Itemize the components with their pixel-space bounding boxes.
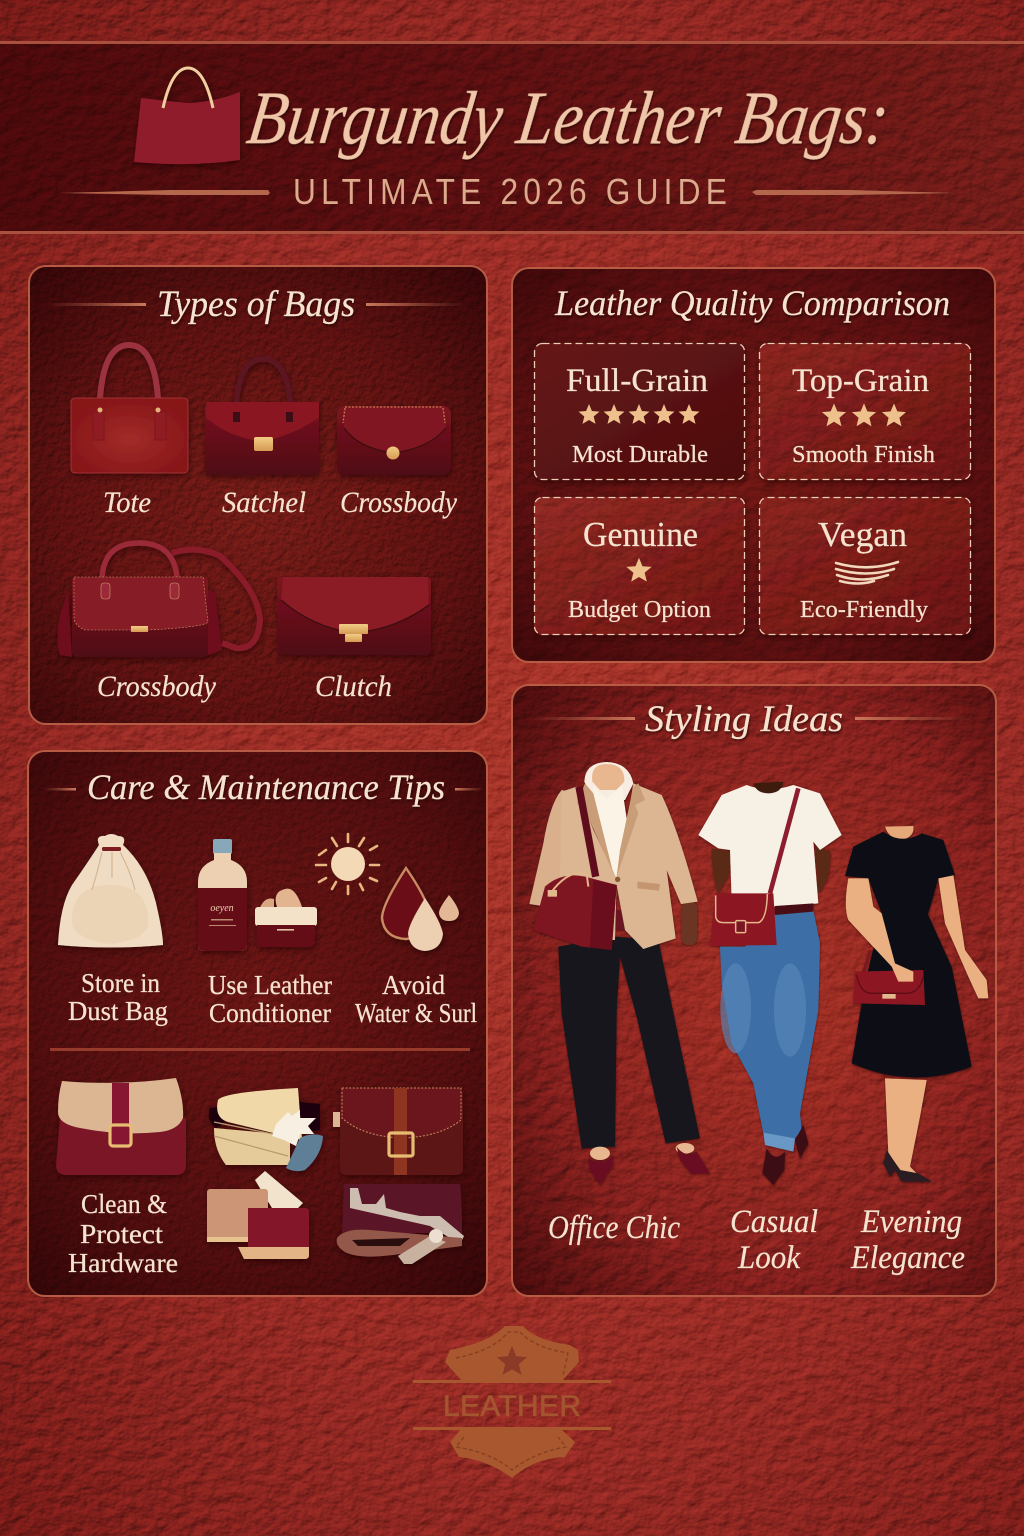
- badge: leather emblem: [413, 1326, 611, 1478]
- heading rules: [44, 788, 483, 790]
- icon: brown satchel: [333, 1088, 463, 1175]
- header banner: [0, 41, 1024, 234]
- heading: types of bags: Types of Bags: [157, 284, 355, 325]
- outfit: office chic: [529, 762, 710, 1185]
- icon: water drops: [382, 868, 459, 951]
- label: evening elegance: Evening: [860, 1204, 962, 1240]
- label: store in dust bag: Store in: [81, 968, 160, 998]
- emblem word: LEATHER: [443, 1390, 581, 1423]
- heading: leather quality comparison: Leather Quality Comparison: [554, 283, 950, 323]
- star: [497, 1346, 527, 1375]
- five stars: [578, 404, 700, 424]
- icon: hardware tool: [337, 1184, 464, 1264]
- label: crossbody bottom: Crossbody: [97, 670, 217, 703]
- label: evening elegance: Elegance: [850, 1240, 965, 1276]
- icon: wallet and cloth: [207, 1171, 309, 1259]
- icon: waves: [836, 562, 898, 584]
- label: use leather conditioner: Use Leather: [208, 970, 332, 1000]
- label: satchel: Satchel: [222, 486, 306, 519]
- panel: styling ideas: [512, 685, 996, 1296]
- card: full-grain: [534, 343, 745, 480]
- card caption: Eco-Friendly: [800, 597, 928, 623]
- emblem rules: [413, 1380, 611, 1430]
- label: clean and protect hardware: Clean &: [81, 1189, 167, 1219]
- icon: cloths and polish: [209, 1088, 323, 1171]
- subtitle rule left: [60, 190, 270, 195]
- divider: [50, 1048, 470, 1051]
- label: use leather conditioner: [208, 970, 332, 1028]
- icon: burgundy tote: [134, 68, 240, 164]
- bag: crossbody small: [337, 406, 451, 475]
- icon: conditioner bottle and jar: [198, 839, 317, 951]
- card caption: Most Durable: [572, 442, 708, 468]
- label: store in dust bag: Dust Bag: [68, 996, 168, 1026]
- outfit: casual look: [698, 782, 842, 1185]
- panel: types of bags: [29, 266, 487, 724]
- card title: Full-Grain: [566, 363, 708, 399]
- bag: clutch: [277, 577, 431, 655]
- card caption: Smooth Finish: [792, 442, 935, 468]
- card: top-grain: [759, 343, 971, 480]
- label: avoid water and sun: [355, 970, 477, 1028]
- subtitle: ULTIMATE 2026 GUIDE: [293, 172, 727, 212]
- icon: clean flap bag: [56, 1078, 186, 1175]
- title: Burgundy Leather Bags:: [243, 75, 894, 160]
- label: crossbody top: Crossbody: [340, 486, 458, 519]
- label: use leather conditioner: Conditioner: [209, 998, 331, 1028]
- card title: Top-Grain: [792, 363, 929, 399]
- icon: sun: [316, 834, 379, 894]
- icon: conditioner bottle and jar: oeyen: [210, 903, 234, 914]
- label: casual look: Look: [737, 1240, 801, 1276]
- label: evening elegance: [850, 1204, 965, 1276]
- card title: Genuine: [583, 515, 698, 554]
- heading: care and maintenance: Care & Maintenance Tips: [87, 767, 445, 807]
- icon: dust bag: [58, 834, 163, 948]
- subtitle rule right: [752, 190, 955, 195]
- card caption: Budget Option: [568, 597, 711, 623]
- label: store in dust bag: [68, 968, 168, 1026]
- label: clean and protect hardware: Hardware: [68, 1248, 178, 1278]
- label: avoid water and sun: Avoid: [382, 970, 445, 1000]
- bag: satchel: [205, 359, 319, 475]
- panel: leather quality comparison: [512, 268, 995, 662]
- label: clean and protect hardware: [68, 1189, 178, 1278]
- card title: Vegan: [818, 515, 907, 554]
- label: avoid water and sun: Water & Surl: [355, 998, 477, 1028]
- panel: care and maintenance: [28, 751, 487, 1296]
- label: tote: Tote: [103, 486, 151, 519]
- label: casual look: Casual: [730, 1204, 818, 1240]
- label: office chic: Office Chic: [548, 1210, 680, 1246]
- bag: crossbody with strap: [58, 543, 260, 657]
- label: clutch: Clutch: [315, 670, 392, 703]
- bag: tote: [71, 345, 188, 473]
- label: clean and protect hardware: Protect: [80, 1219, 164, 1249]
- heading rules: [46, 303, 466, 306]
- heading: styling ideas: Styling Ideas: [645, 699, 843, 740]
- one star: [626, 558, 652, 582]
- card: genuine: [534, 497, 745, 635]
- label: casual look: [730, 1204, 818, 1276]
- three stars: [822, 403, 906, 426]
- heading rules: [530, 717, 973, 720]
- card: vegan: [759, 497, 971, 635]
- outfit: evening elegance: [845, 826, 988, 1182]
